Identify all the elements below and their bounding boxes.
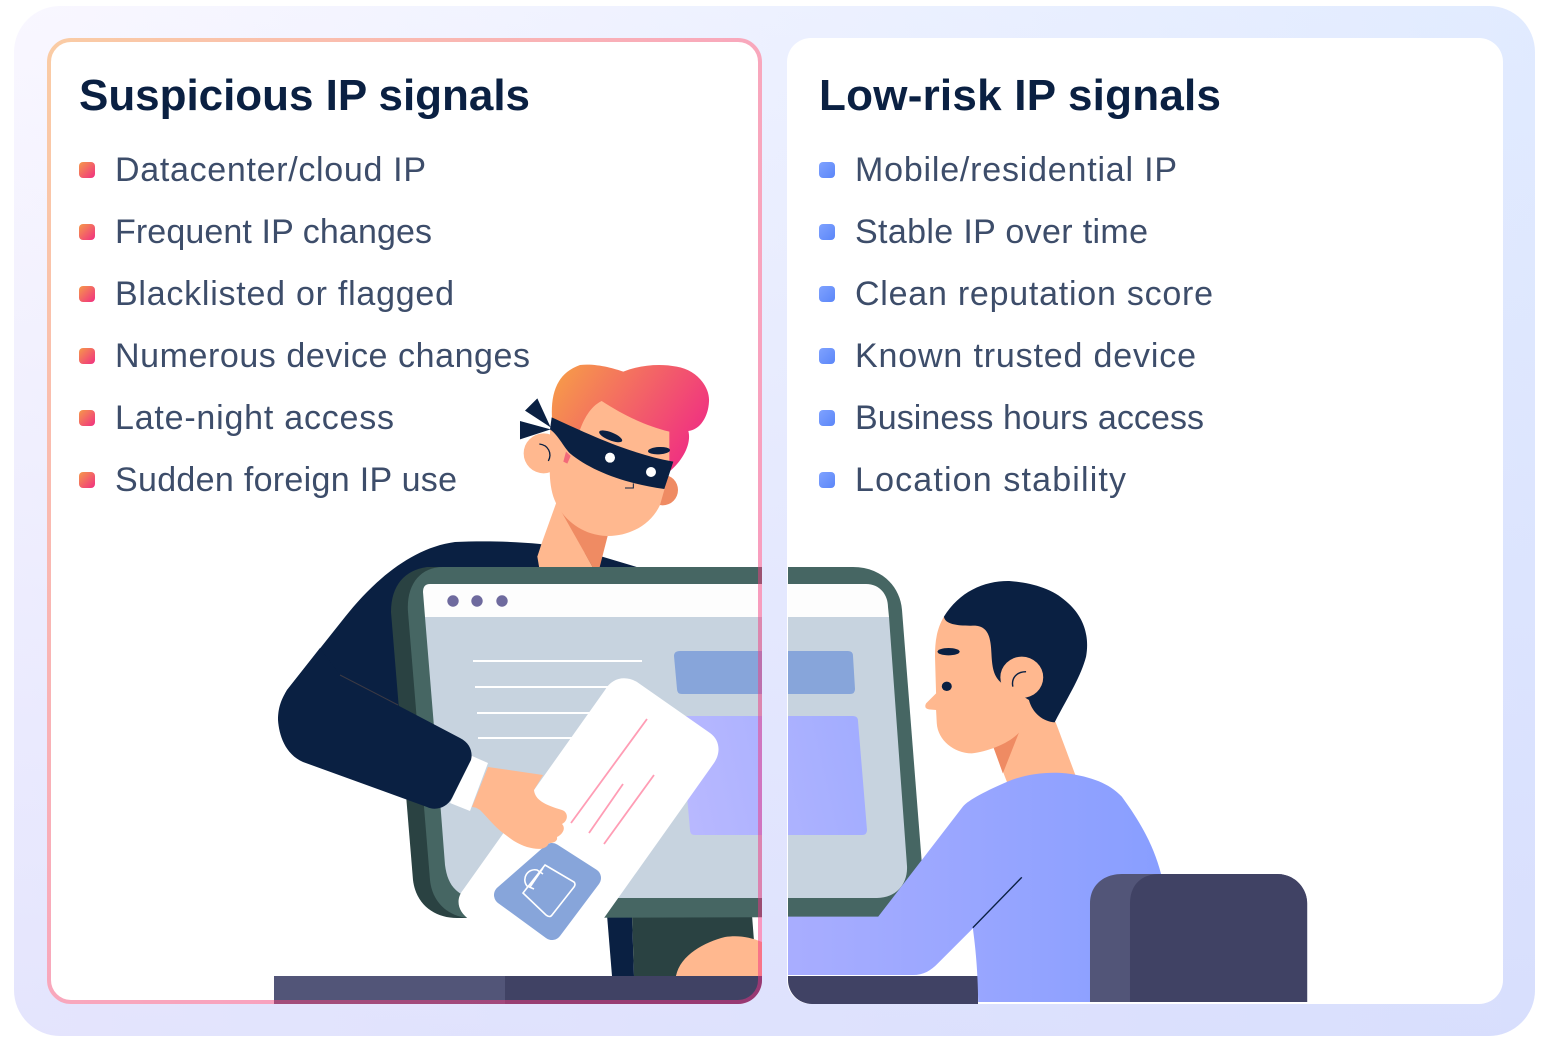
list: low-risk signals: Mobile/residential IP [855,151,1177,189]
tablet pink lines [571,719,654,844]
thief brow left [599,430,622,442]
thief ear line [539,444,550,461]
heading: suspicious IP signals: Suspicious IP signals [79,71,530,120]
thief arm [278,648,472,809]
thief lower body [607,915,762,976]
panel: low-risk card background [787,38,1503,1004]
user eye [942,682,952,691]
screen [425,617,907,898]
user brow [937,648,960,655]
suspicious card gradient border [49,40,760,1002]
panel: suspicious card background [47,38,762,1004]
user ear line [1013,672,1026,687]
text lines [473,661,643,738]
user hair [944,581,1087,722]
chair front [1130,874,1307,1002]
list: low-risk signals [819,151,1213,499]
heading: low-risk IP signals: Low-risk IP signals [819,71,1221,120]
tablet blue label [504,853,591,930]
tablet body [458,678,718,918]
user shirt [784,773,1161,1002]
thief eye right [646,467,656,477]
thief eye left [605,453,615,463]
thief cuff [450,756,488,811]
icon: shopping bag [523,865,575,916]
list: low-risk signals: Location stability [855,461,1126,499]
shirt crease [973,877,1022,928]
chair back [1090,874,1307,1002]
thief torso [284,541,636,706]
list: suspicious signals: Sudden foreign IP use [115,461,457,499]
list: suspicious signals: Datacenter/cloud IP [115,151,426,189]
window dots [447,595,508,607]
purple panel [680,716,867,835]
thief neck shadow [562,513,608,567]
sleeve crease [340,675,398,705]
thief hair [552,365,709,472]
thief sideburn [563,452,571,464]
list: suspicious signals [79,151,530,499]
monitor frame [408,567,923,918]
list: low-risk signals: Business hours access [855,399,1204,437]
blue panel [674,651,855,694]
tablet [459,678,719,950]
list: suspicious signals: Frequent IP changes [115,213,432,251]
list: low-risk signals: Clean reputation score [855,275,1213,313]
monitor [391,567,923,918]
thief neck [537,502,593,568]
list: suspicious signals: Numerous device changes [115,337,530,375]
user neck [993,700,1075,783]
title bar [423,584,889,617]
list: suspicious signals: Blacklisted or flagged [115,275,454,313]
thief far ear [660,476,678,506]
list: low-risk signals: Known trusted device [855,337,1196,375]
illustration: thief and user at a monitor [274,365,1307,1004]
thief hand [472,767,567,849]
thief ear [524,433,550,474]
monitor back edge [391,567,467,918]
list: low-risk signals: Stable IP over time [855,213,1148,251]
thief face [550,401,670,536]
thief nose [625,483,633,488]
mask knot [520,398,551,439]
thief head [520,365,709,568]
user face [925,610,1031,753]
thief mask [550,417,673,489]
user ear [1000,657,1043,698]
user neck shadow [993,733,1019,773]
list: suspicious signals: Late-night access [115,399,394,437]
thief brow right [648,447,670,454]
user figure [784,581,1307,1002]
desk [274,976,978,1004]
